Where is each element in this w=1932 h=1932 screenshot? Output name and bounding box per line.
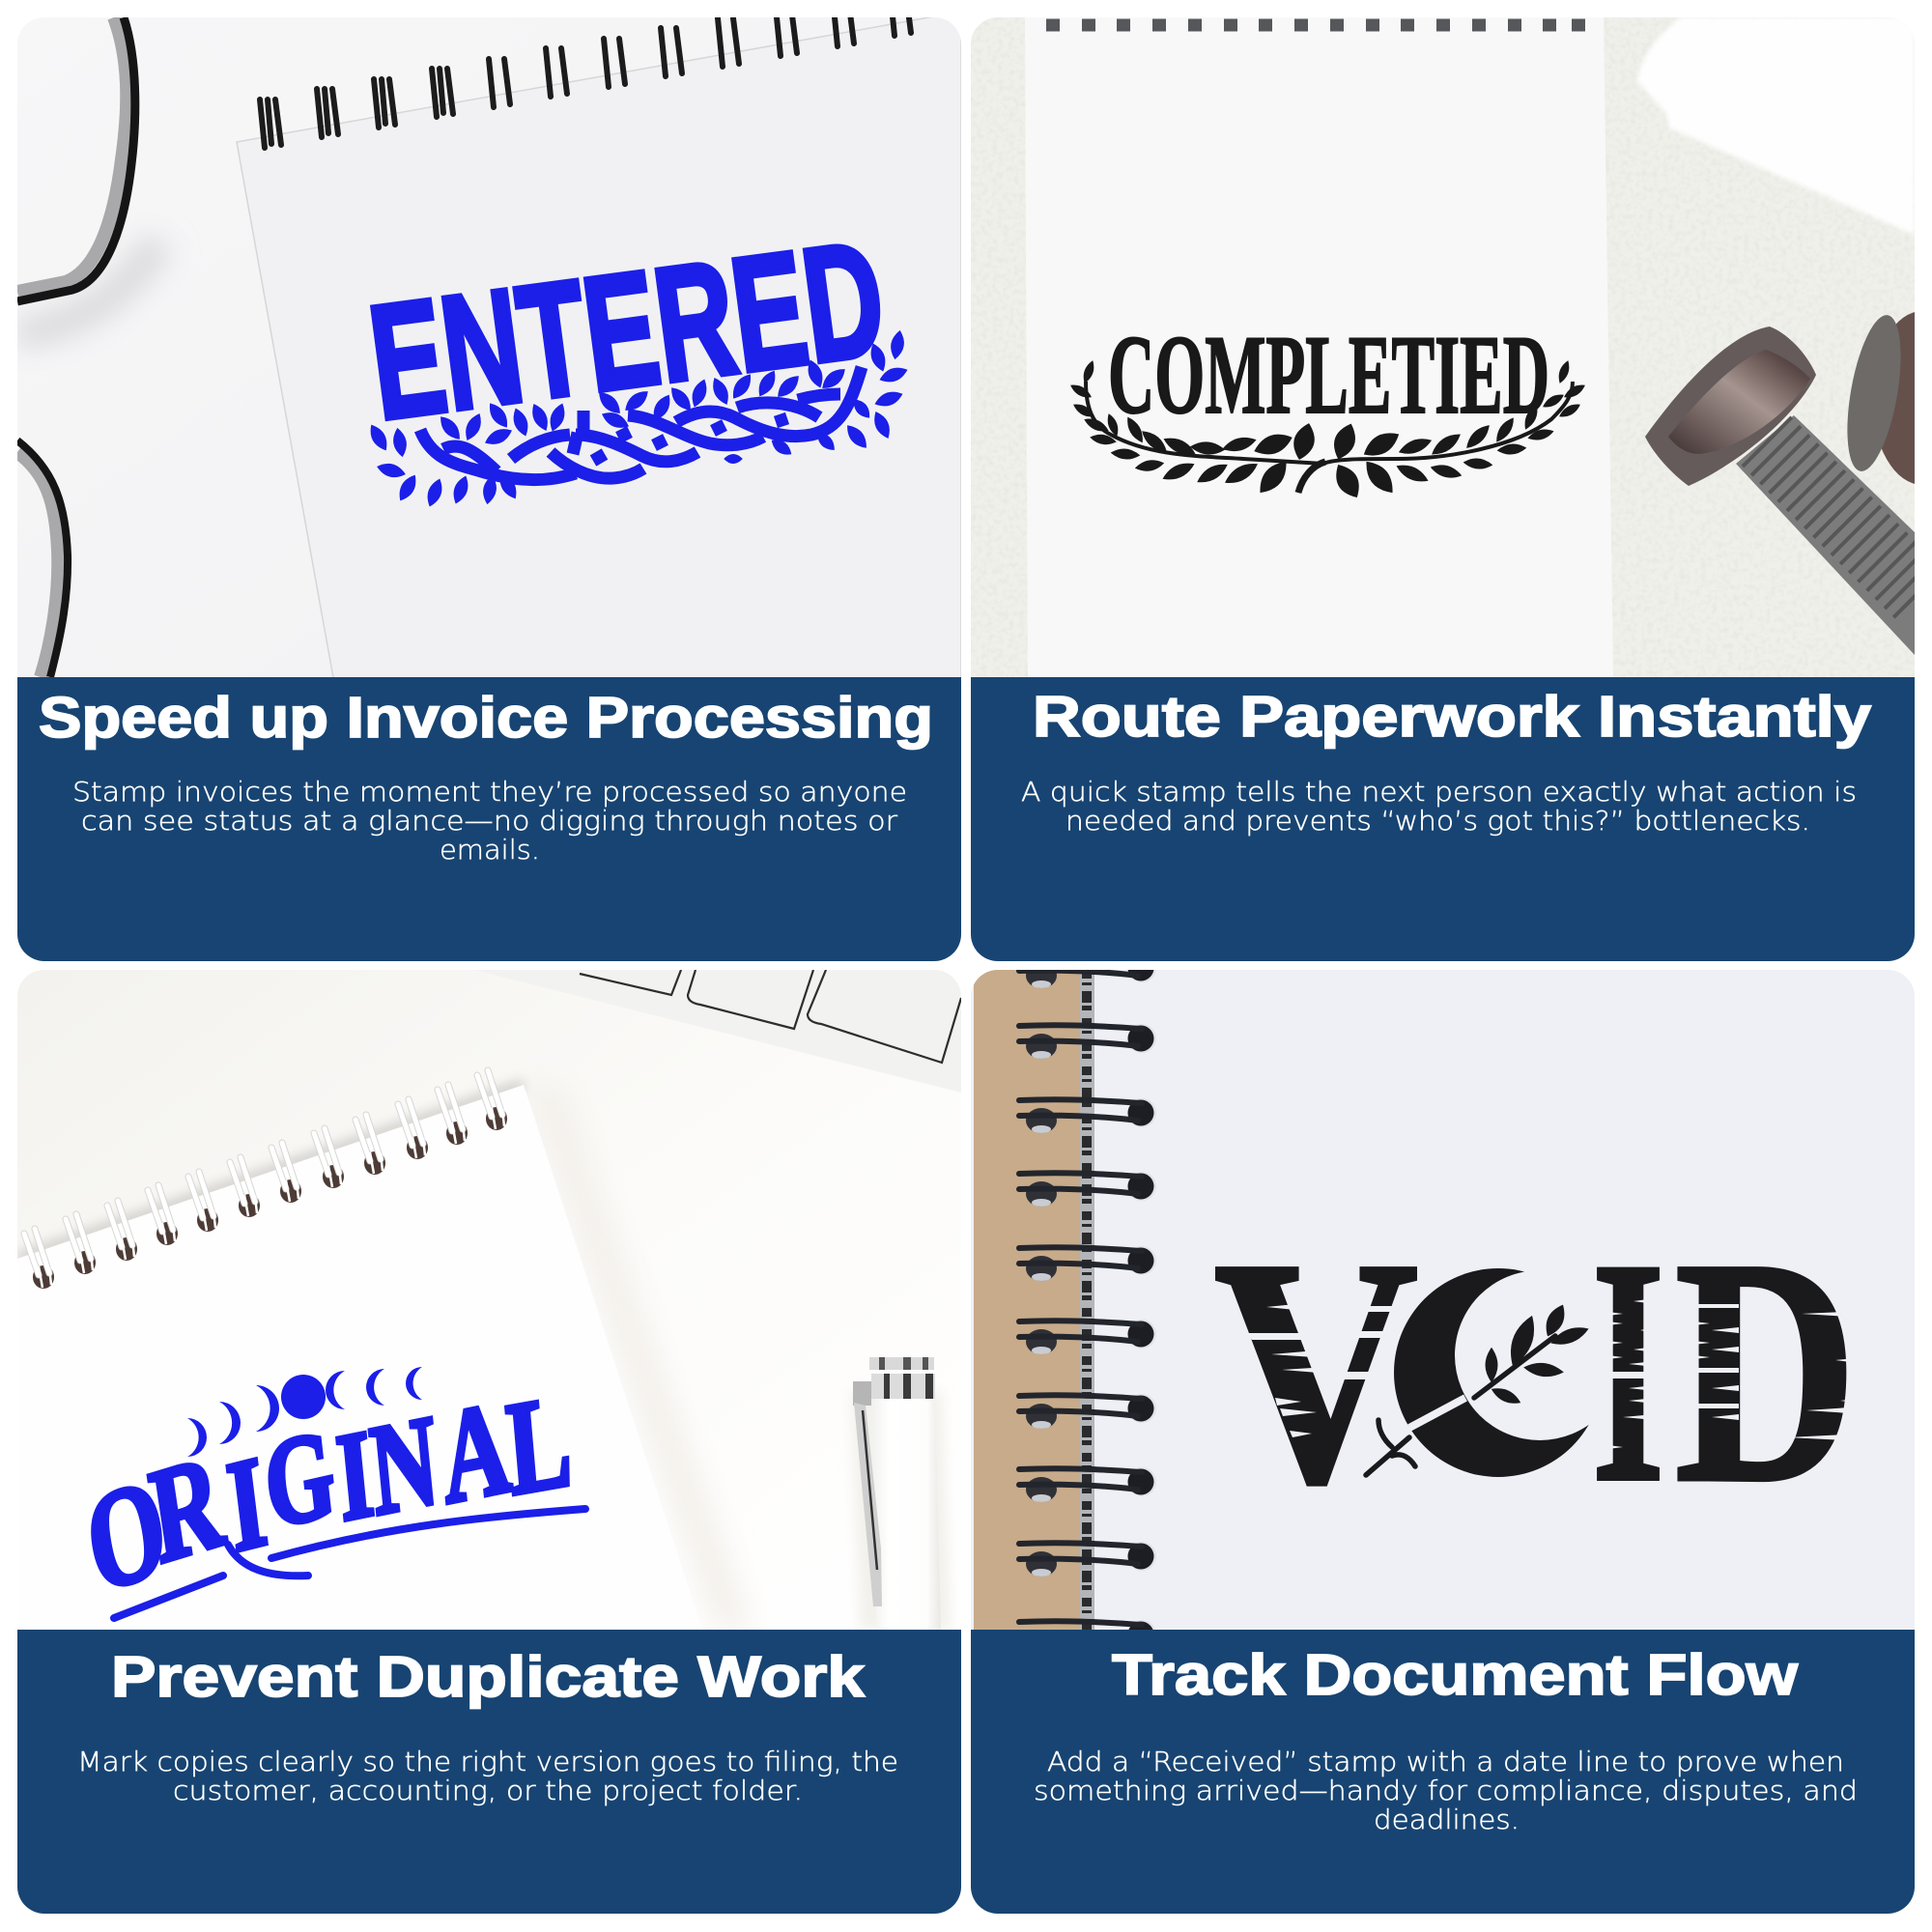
stamp word: COMPLETIED (1108, 313, 1549, 438)
braided vine ornament (365, 329, 910, 509)
text band (971, 677, 1915, 961)
photo: notepad, keyboard and pen (17, 970, 961, 1636)
body copy (1021, 776, 1857, 837)
body copy: Add a “Received” stamp with a date line to prove when (1047, 1746, 1844, 1777)
letter I: I (1591, 1192, 1665, 1550)
body copy: emails. (440, 834, 540, 866)
moon phases (187, 1367, 422, 1457)
stamp: VOID (1213, 1192, 1864, 1550)
panel: speed up invoice processing (17, 17, 961, 961)
photo: spiral notebook (971, 953, 1915, 1655)
heading: Prevent Duplicate Work (111, 1645, 865, 1709)
stamp: ORIGINAL (76, 1366, 585, 1624)
body copy: can see status at a glance—no digging through notes or (81, 805, 898, 837)
stamp word: G (258, 1404, 341, 1556)
panel: route paperwork instantly (971, 17, 1915, 961)
notepad shadow (524, 1086, 753, 1630)
body copy: customer, accounting, or the project folder. (173, 1775, 803, 1806)
page edge (1080, 970, 1094, 1636)
stamp: ENTERED (360, 207, 910, 509)
heading: Route Paperwork Instantly (1033, 685, 1871, 749)
spiral rings (1019, 953, 1156, 1655)
stamp word: R (142, 1425, 232, 1593)
keyboard (474, 970, 961, 1093)
glasses (17, 17, 135, 677)
stamp word: I (331, 1404, 379, 1548)
stamp word: O (76, 1447, 177, 1624)
right bolt (1837, 311, 1932, 485)
spiral rings (24, 1070, 507, 1289)
towel (1637, 17, 1915, 235)
stamp word: A (435, 1373, 516, 1532)
text band (17, 1630, 961, 1914)
panel: prevent duplicate work (17, 970, 961, 1914)
heading: Speed up Invoice Processing (39, 686, 933, 750)
stamp word: I (220, 1429, 273, 1580)
heading: Track Document Flow (1112, 1643, 1798, 1707)
body copy: Stamp invoices the moment they’re processed so anyone (72, 776, 907, 808)
notebook page (237, 12, 961, 694)
body copy (72, 776, 907, 866)
pen (850, 1357, 952, 1630)
photo: notebook and glasses (17, 0, 961, 694)
binding squares (1046, 19, 1585, 31)
body copy: A quick stamp tells the next person exactly what action is (1021, 776, 1857, 808)
letter V: V (1213, 1192, 1419, 1550)
distressed cuts (1246, 1298, 1864, 1450)
body copy (1034, 1746, 1858, 1835)
body copy: something arrived—handy for compliance, disputes, and (1034, 1775, 1858, 1806)
stamp: COMPLETIED (1068, 313, 1587, 502)
cardboard cover (974, 970, 1080, 1636)
body copy: needed and prevents “who’s got this?” bottlenecks. (1065, 805, 1810, 837)
body copy: Mark copies clearly so the right version goes to filing, the (77, 1746, 898, 1777)
letter D: D (1674, 1192, 1858, 1550)
body copy: deadlines. (1374, 1804, 1520, 1835)
bolt thread (1736, 415, 1915, 655)
text band (17, 677, 961, 961)
glasses shadow (17, 242, 159, 333)
bolt head (1645, 327, 1816, 486)
stamp word: L (501, 1366, 576, 1523)
panel: track document flow (971, 970, 1915, 1914)
moon letter O with branch (1366, 1268, 1625, 1477)
notepad page (1025, 17, 1613, 677)
notepad page (17, 1085, 702, 1630)
underline swashes (114, 1509, 585, 1618)
body copy (77, 1746, 898, 1806)
photo: notepad, towel and bolts (971, 17, 1932, 684)
stamp word: N (365, 1389, 443, 1544)
text band (971, 1630, 1915, 1914)
laurel ornament (1068, 359, 1587, 502)
spiral rings (260, 0, 911, 148)
